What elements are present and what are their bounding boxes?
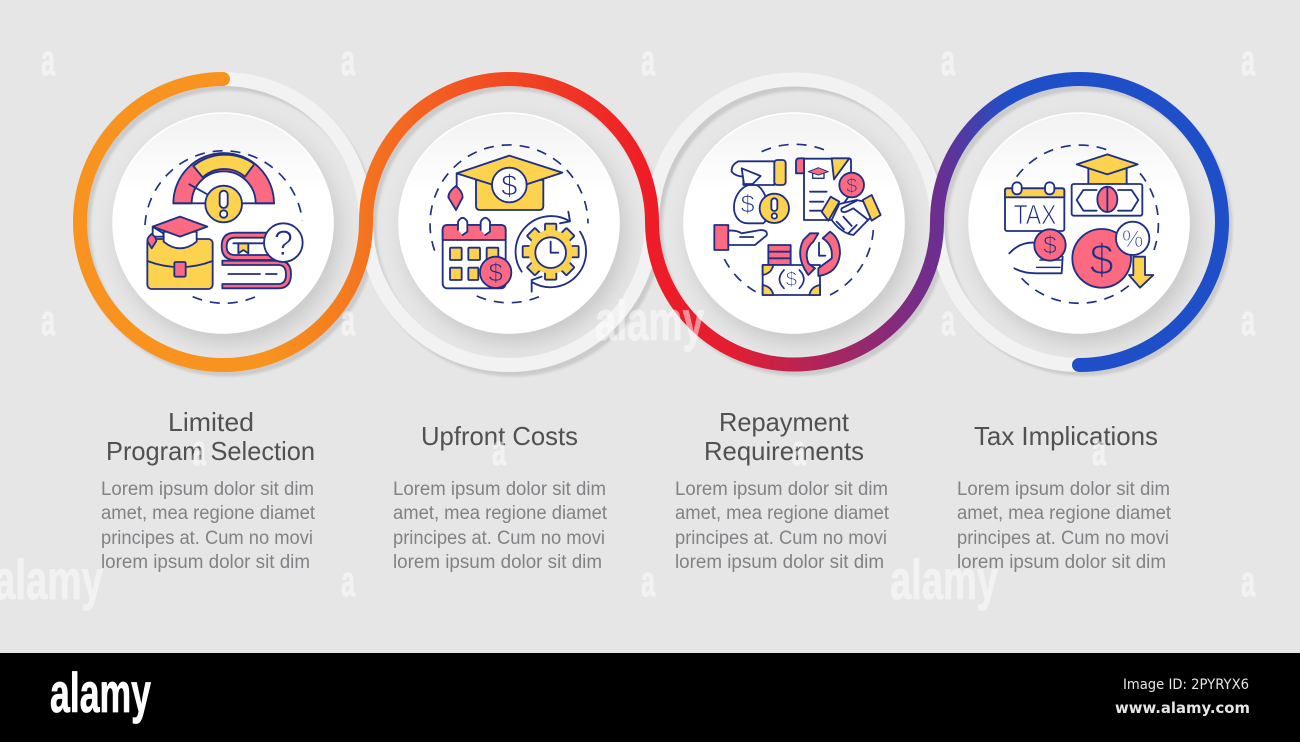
- watermarks: a: [941, 36, 955, 85]
- contract: $: [846, 176, 857, 198]
- label 1: limited program selection: Lorem ipsum dolor sit dim: [101, 479, 314, 500]
- gauge: [173, 153, 274, 222]
- cap and banknote: [1072, 154, 1142, 216]
- icon: limited program selection: [145, 151, 303, 303]
- banknote and coins: [763, 245, 820, 295]
- label 1: limited program selection: principes at. Cum no movi: [101, 528, 313, 549]
- lower hand: [714, 225, 767, 250]
- label 1: limited program selection: lorem ipsum dolor sit dim: [101, 552, 310, 573]
- hand and coin: $: [1043, 233, 1057, 260]
- watermarks: a: [492, 426, 506, 475]
- label 3: repayment requirements: Lorem ipsum dolor sit dim: [675, 479, 888, 500]
- label 3: repayment requirements: lorem ipsum dolor sit dim: [675, 552, 884, 573]
- label 2: upfront costs: principes at. Cum no movi: [393, 528, 605, 549]
- big coin with arrow and percent: $: [1090, 236, 1114, 284]
- watermarks: a: [192, 426, 206, 475]
- hand and coin: [1009, 229, 1066, 273]
- ring shadows: [84, 84, 1226, 370]
- watermarks: alamy: [890, 548, 998, 611]
- contract: [796, 158, 864, 220]
- continuous gradient ribbon: [80, 79, 1222, 365]
- cap with dollar: [448, 156, 562, 210]
- calendar: $: [488, 258, 503, 288]
- website: www.alamy.com: [1115, 699, 1250, 717]
- watermarks: a: [1241, 296, 1255, 345]
- gear with clock: [516, 212, 586, 292]
- icon: tax implications: [1005, 145, 1158, 303]
- watermarks: a: [341, 296, 355, 345]
- label 3: repayment requirements: amet, mea regione diamet: [675, 503, 890, 524]
- icon: upfront costs: [430, 145, 588, 303]
- watermarks: a: [792, 426, 806, 475]
- label 3: repayment requirements: principes at. Cum no movi: [675, 528, 887, 549]
- image id: Image ID: 2PYRYX6: [1123, 677, 1249, 693]
- label 4: tax implications: Lorem ipsum dolor sit dim: [957, 479, 1170, 500]
- light background ring arcs: [225, 79, 1079, 365]
- refresh clock: [800, 232, 840, 276]
- disc 4: [969, 113, 1189, 333]
- handshake: [822, 195, 881, 235]
- calendar: [443, 218, 511, 288]
- label 4: tax implications: principes at. Cum no movi: [957, 528, 1169, 549]
- label 4: tax implications: [957, 421, 1172, 573]
- footer logo: alamy: [50, 661, 151, 724]
- disc 2: [399, 113, 619, 333]
- tax calendar: [1005, 182, 1064, 231]
- watermarks: a: [641, 557, 655, 606]
- watermarks: a: [1241, 557, 1255, 606]
- money bag and upper hand: [732, 160, 789, 223]
- books with question: [222, 223, 303, 288]
- watermarks: alamy: [595, 289, 704, 352]
- disc 3: [684, 113, 904, 333]
- footer bar: [0, 653, 1300, 742]
- watermarks: a: [341, 36, 355, 85]
- watermarks: [0, 36, 1255, 611]
- watermarks: a: [1092, 426, 1106, 475]
- label 2: upfront costs: [393, 421, 608, 573]
- label 1: limited program selection: Program Selection: [106, 436, 315, 466]
- watermarks: a: [41, 296, 55, 345]
- watermarks: a: [641, 36, 655, 85]
- label 3: repayment requirements: Requirements: [704, 436, 864, 466]
- icon: repayment requirements: [714, 144, 881, 295]
- briefcase with cap: [147, 217, 213, 289]
- label 1: limited program selection: amet, mea regione diamet: [101, 503, 316, 524]
- watermarks: a: [341, 557, 355, 606]
- label 2: upfront costs: lorem ipsum dolor sit dim: [393, 552, 602, 573]
- label 4: tax implications: amet, mea regione diamet: [957, 503, 1172, 524]
- disc 1: [113, 113, 333, 333]
- tax calendar: TAX: [1014, 199, 1057, 230]
- cap with dollar: $: [501, 170, 517, 203]
- label 1: limited program selection: [101, 407, 316, 573]
- banknote and coins: $: [786, 268, 798, 291]
- label 4: tax implications: lorem ipsum dolor sit dim: [957, 552, 1166, 573]
- label 3: repayment requirements: Repayment: [719, 407, 850, 437]
- watermarks: a: [941, 296, 955, 345]
- big coin with arrow and percent: [1072, 222, 1153, 288]
- label 3: repayment requirements: [675, 407, 890, 573]
- label 2: upfront costs: Lorem ipsum dolor sit dim: [393, 479, 606, 500]
- label 1: limited program selection: Limited: [168, 407, 254, 437]
- label 4: tax implications: Tax Implications: [974, 421, 1158, 451]
- watermarks: a: [41, 36, 55, 85]
- big coin with arrow and percent: %: [1122, 226, 1143, 253]
- label 2: upfront costs: amet, mea regione diamet: [393, 503, 608, 524]
- books with question: ?: [274, 224, 293, 263]
- watermarks: a: [1241, 36, 1255, 85]
- label 2: upfront costs: Upfront Costs: [421, 421, 578, 451]
- money bag and upper hand: $: [741, 191, 755, 219]
